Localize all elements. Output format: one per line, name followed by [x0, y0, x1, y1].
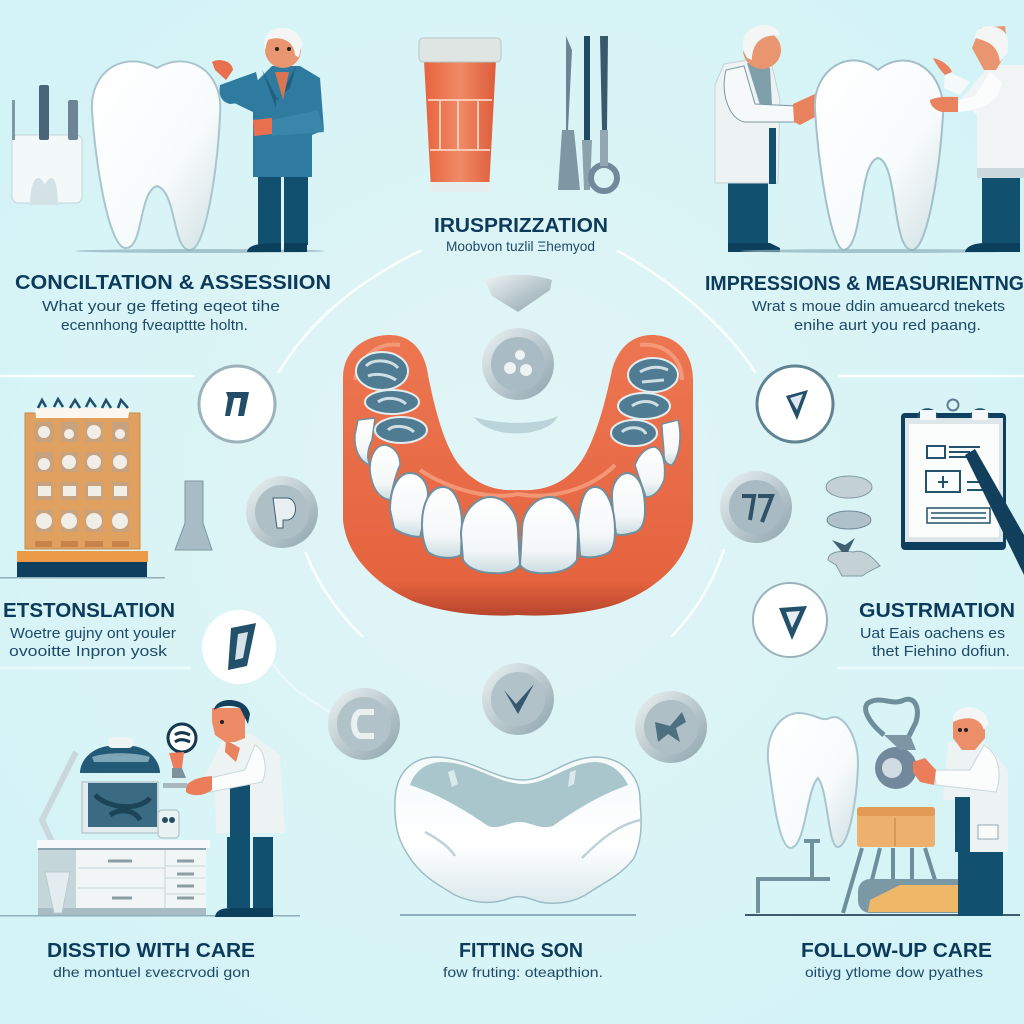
- icon: orange shelving: [0, 399, 165, 578]
- icon: dental workstation: [0, 737, 300, 916]
- icon: tooth: [768, 713, 858, 848]
- heading: ETSTONSLATION: [3, 600, 175, 622]
- figure: dentist in white coat: [163, 700, 285, 917]
- icon: test tube stand: [175, 481, 212, 550]
- panel: impressions and measurements: [705, 25, 1024, 334]
- figure: left dentist: [715, 25, 817, 252]
- heading: IMPRESSIONS & MEASURIENTNG: [705, 273, 1024, 295]
- icon: measuring device: [866, 699, 917, 789]
- description: Uat Eais oachens es: [860, 625, 1005, 642]
- panel: left manufacturing: [0, 399, 212, 660]
- centre shadow arc: [474, 416, 558, 433]
- icon: instrument holder: [12, 85, 82, 205]
- silver button: top: [482, 328, 554, 400]
- description: What your ge ffeting eqeot tihe: [42, 298, 280, 315]
- panel: discussion with care: [0, 700, 300, 980]
- icon: large tooth: [815, 60, 943, 250]
- panel: right customization: [826, 400, 1024, 660]
- circle badge: upper left: [199, 366, 275, 442]
- connector lines: [0, 251, 1024, 712]
- clasp texture: [366, 361, 668, 434]
- tooth shadow: [75, 249, 325, 253]
- main denture illustration: [343, 335, 693, 616]
- circle badge: lower left: [202, 610, 276, 684]
- description: Woetre gujny ont youler: [10, 625, 176, 642]
- heading: DISSTIO WITH CARE: [47, 940, 255, 962]
- silver button: left: [246, 476, 318, 548]
- description line 2: ovooitte Inpron yosk: [9, 643, 168, 660]
- panel: top centre: [419, 36, 617, 312]
- front teeth: [390, 473, 645, 573]
- back teeth and metal clasps: [355, 418, 680, 500]
- gum base: [343, 335, 693, 616]
- silver button: bottom centre: [482, 663, 554, 735]
- description: oitiyg ytlome dow pyathes: [805, 964, 983, 980]
- heading: IRUSPRIZZATION: [434, 215, 608, 237]
- gum highlight: [355, 345, 682, 496]
- icon: small silver tip: [485, 275, 552, 312]
- description line 2: ecennhong fveαιpttte holtn.: [61, 317, 248, 334]
- heading: FOLLOW-UP CARE: [801, 940, 992, 962]
- figure: dentist: [913, 707, 1008, 916]
- description line 2: thet Fiehino dofiun.: [872, 643, 1010, 660]
- circle badge: lower right: [753, 583, 827, 657]
- circle badge: upper right: [757, 366, 833, 442]
- description: Wrat s moue ddin amuearcd tnekets: [752, 298, 1005, 315]
- silver button: bottom right: [635, 691, 707, 763]
- icon: white mouth tray: [395, 757, 641, 916]
- panel: fitting: [395, 757, 641, 980]
- panel: follow-up care: [745, 699, 1020, 980]
- tooth shadow: [740, 249, 1020, 253]
- figure: right dentist: [930, 26, 1024, 252]
- icon: clipboard: [901, 400, 1006, 550]
- figure: dentist in blue coat: [212, 28, 324, 252]
- description: Moobvon tuzlil Ξhemyod: [446, 238, 595, 254]
- description line 2: enihe aurt you red paang.: [794, 317, 981, 334]
- icon: pen: [965, 449, 1024, 575]
- description: fow fruting: oteapthion.: [443, 964, 603, 980]
- icon: large tooth: [92, 61, 220, 250]
- silver button: right: [720, 471, 792, 543]
- heading: FITTING SON: [459, 940, 583, 962]
- panel: consultation and assessment: [12, 28, 331, 334]
- icon: dental tools: [558, 36, 617, 191]
- icon: cup: [419, 38, 501, 192]
- description: dhe montuel εveεcrvodi gon: [53, 964, 250, 980]
- icons: material samples: [826, 476, 880, 576]
- heading: GUSTRMATION: [859, 600, 1015, 622]
- silver button: bottom left: [328, 688, 400, 760]
- heading: CONCILTATION & ASSESSIION: [15, 272, 331, 294]
- icon: orange bench: [745, 807, 1020, 916]
